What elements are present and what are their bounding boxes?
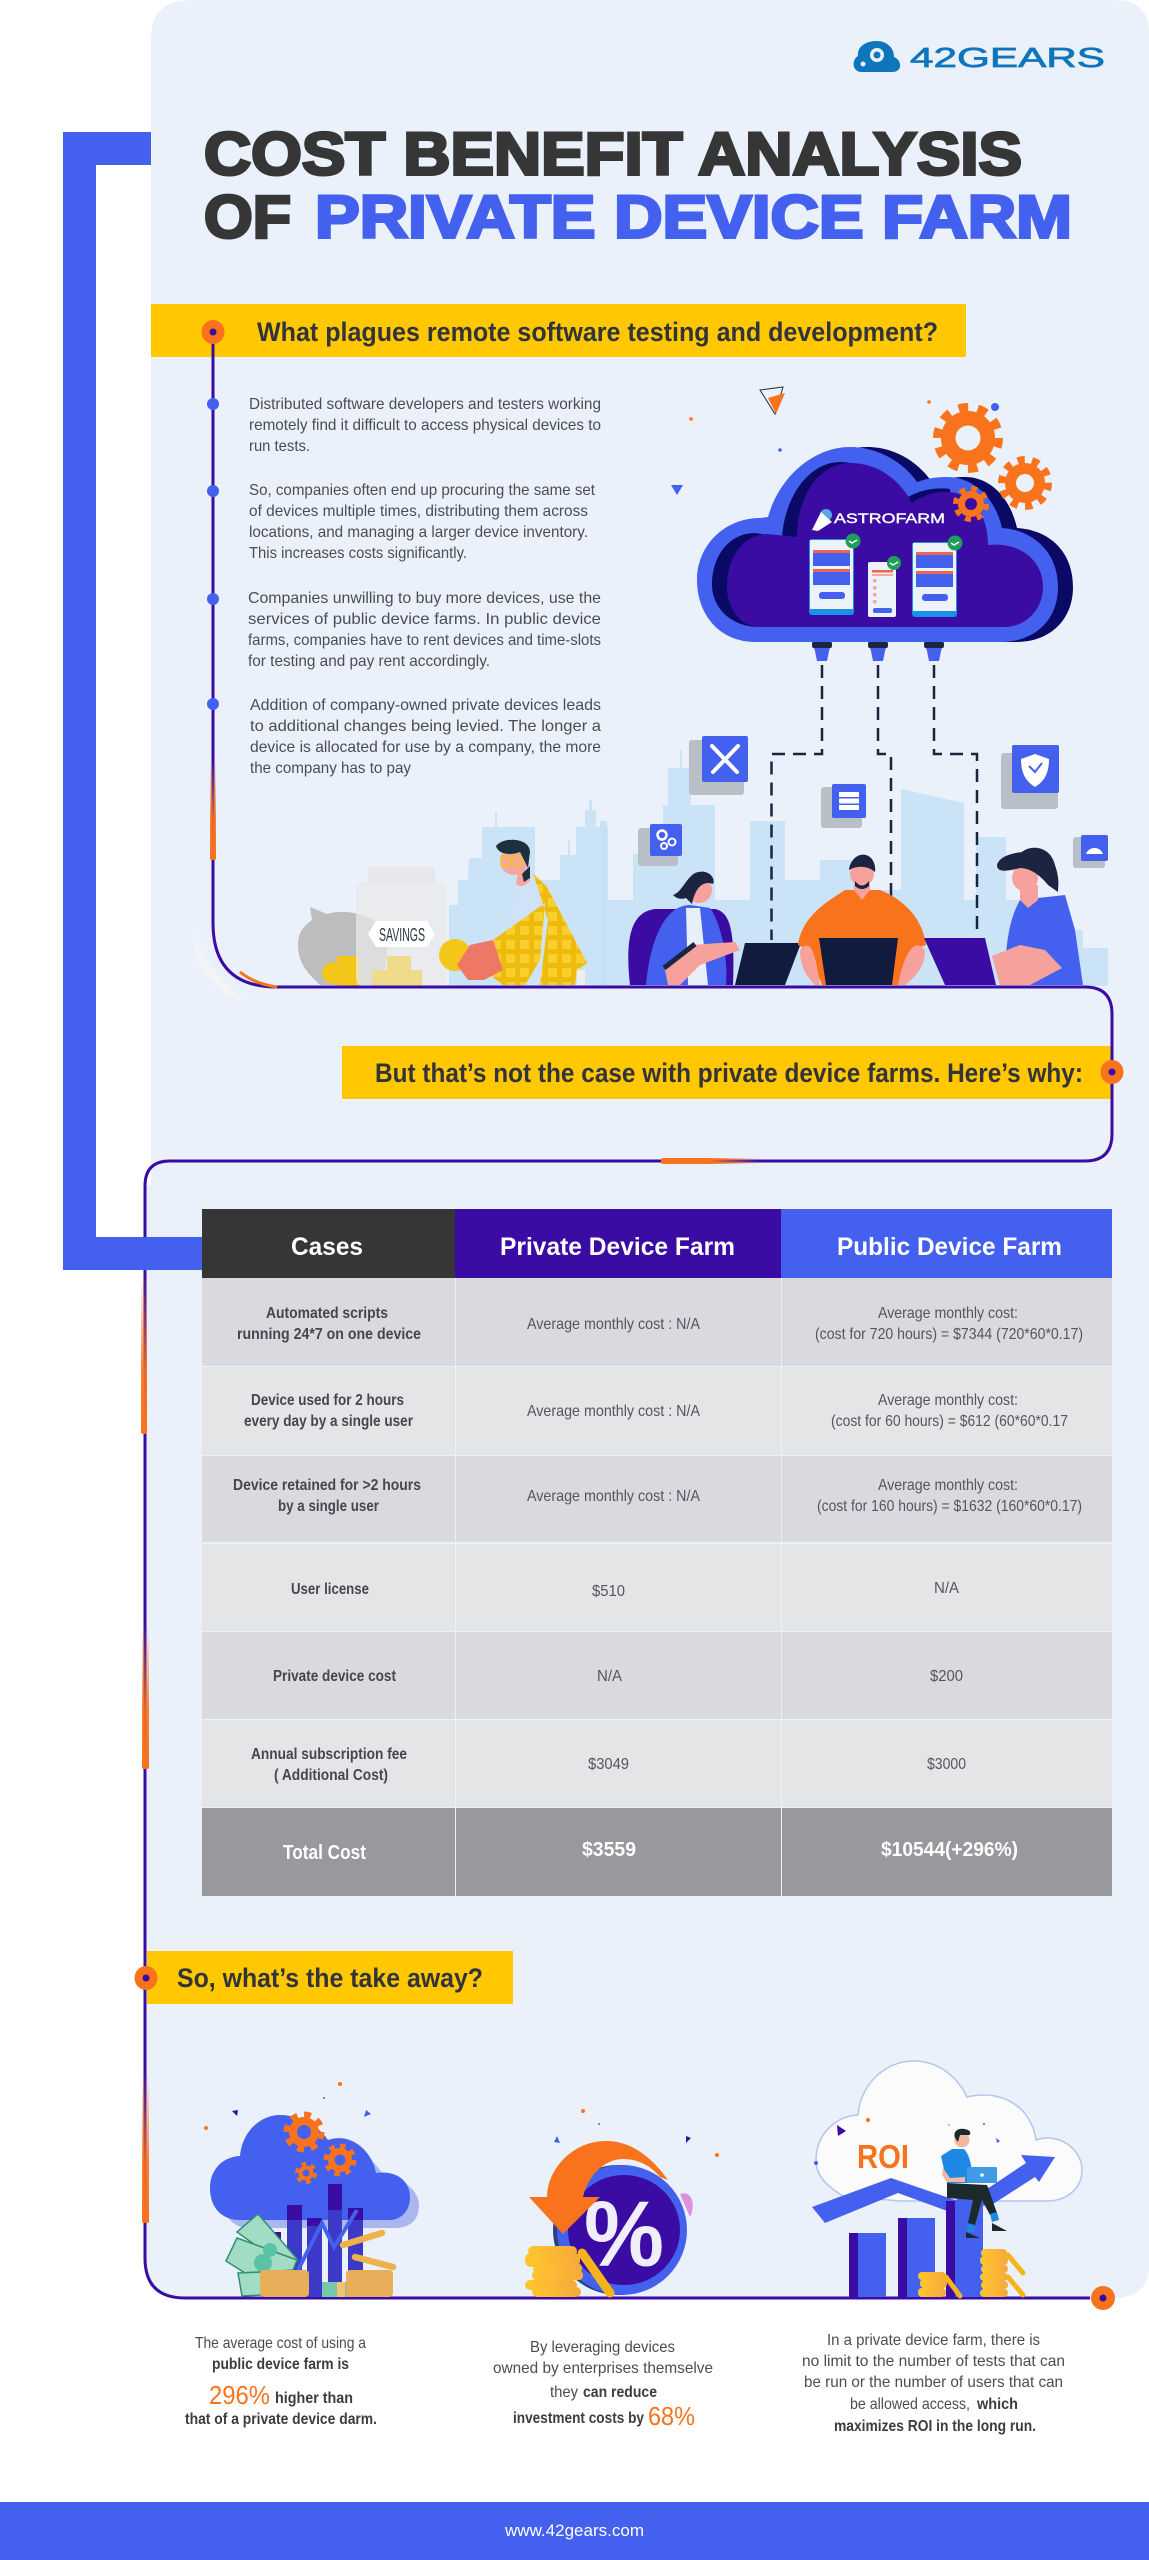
- takeaway text: ROI: In a private device farm, there is: [827, 2332, 1040, 2349]
- timeline dot: section one: [202, 320, 224, 344]
- text block: company-owned devices: [250, 697, 601, 777]
- row: annual subscription: Annual subscription fee: [251, 1746, 407, 1763]
- blue bracket: [63, 132, 202, 1270]
- city skyline: [449, 750, 1108, 986]
- row: 2 hours: Average monthly cost:: [878, 1392, 1018, 1409]
- heading bar: what plagues: [151, 304, 966, 357]
- row: 2 hours: [244, 1392, 1068, 1430]
- jar lid: [368, 867, 435, 882]
- takeaway text: ROI: maximizes ROI in the long run.: [834, 2418, 1036, 2435]
- takeaway text: investment costs: investment costs by: [513, 2410, 644, 2427]
- row: automated scripts: (cost for 720 hours) = $7344 (720*60*0.17): [815, 1326, 1083, 1343]
- icon: server: [821, 784, 866, 828]
- timeline dot: section two: [1100, 1060, 1124, 1084]
- text block: procuring devices: of devices multiple times, distributing them across: [249, 503, 588, 520]
- row: user license: [291, 1580, 959, 1600]
- row backgrounds: [202, 1278, 1112, 1896]
- connectors from cloud: [772, 642, 977, 940]
- background panel: [146, 0, 1149, 2298]
- takeaway text: public farm cost: that of a private device darm.: [185, 2411, 377, 2428]
- takeaway text: ROI: be run or the number of users that can: [804, 2374, 1063, 2391]
- row: user license: N/A: [934, 1580, 959, 1597]
- illustration: cloud with chart and money: [204, 2082, 419, 2297]
- row: 2 hours: (cost for 60 hours) = $612 (60*60*0.17: [831, 1413, 1068, 1430]
- icon: gears box: [638, 824, 682, 866]
- astrofarm brand: ASTROFARM: [834, 510, 945, 526]
- row: user license: $510: [592, 1583, 625, 1600]
- takeaway text: public farm cost: [185, 2335, 377, 2428]
- comparison table: [202, 1209, 1112, 1896]
- row: annual subscription: $3000: [927, 1756, 966, 1773]
- illustration: woman at laptop: [628, 872, 801, 985]
- timeline dot: end: [1091, 2286, 1115, 2310]
- ROI label: ROI: [857, 2138, 909, 2175]
- timeline dot: section three: [134, 1966, 158, 1990]
- floating decorations: [671, 387, 999, 495]
- person on chart: [941, 2129, 1007, 2238]
- astrofarm brand: [812, 509, 945, 531]
- coins: [525, 2246, 583, 2297]
- bullets: [207, 398, 219, 710]
- row: more than 2 hours: by a single user: [278, 1498, 379, 1515]
- takeaway text: public farm cost: The average cost of using a: [195, 2335, 366, 2352]
- text block: procuring devices: So, companies often end up procuring the same set: [249, 482, 596, 499]
- row: more than 2 hours: Average monthly cost : N/A: [527, 1488, 700, 1505]
- row: annual subscription: $3049: [588, 1756, 629, 1773]
- row: annual subscription: ( Additional Cost): [274, 1767, 388, 1784]
- row: more than 2 hours: Average monthly cost:: [878, 1477, 1018, 1494]
- timeline connector: [141, 332, 1112, 2298]
- illustration: savings jar and piggy: [298, 867, 447, 986]
- icon: tools: [689, 736, 748, 795]
- row: 2 hours: Device used for 2 hours: [251, 1392, 404, 1409]
- takeaway text: ROI: no limit to the number of tests that can: [802, 2353, 1065, 2370]
- takeaway text: public farm cost: public device farm is: [212, 2356, 349, 2373]
- row: total cost: Total Cost: [283, 1842, 366, 1864]
- heading bar: private device farms: But that’s not the case with private device farms. Here’s why:: [375, 1058, 1083, 1088]
- title: PRIVATE DEVICE FARM: [315, 184, 1072, 250]
- row: automated scripts: [237, 1305, 1083, 1343]
- table header: Cases: [291, 1233, 363, 1261]
- gear medium: [1002, 460, 1048, 506]
- row: more than 2 hours: (cost for 160 hours) = $1632 (160*60*0.17): [817, 1498, 1082, 1515]
- text block: public device farms: services of public device farms. In public device: [248, 611, 601, 628]
- text block: procuring devices: [249, 482, 596, 562]
- text block: company-owned devices: to additional changes being levied. The longer a: [250, 718, 601, 735]
- bars: [849, 2201, 983, 2297]
- text block: public device farms: Companies unwilling to buy more devices, use the: [248, 590, 601, 607]
- logo: 42Gears: [854, 41, 1105, 73]
- heading bar: takeaway: [147, 1951, 513, 2004]
- illustration: man at laptop: [798, 855, 926, 985]
- row: user license: User license: [291, 1581, 369, 1598]
- text block: procuring devices: locations, and managing a larger device inventory.: [249, 524, 588, 541]
- white cloud: [816, 2061, 1082, 2201]
- heading bar: private device farms: [342, 1046, 1112, 1099]
- row: more than 2 hours: [233, 1477, 1082, 1515]
- title: OF: [204, 184, 291, 250]
- illustration: man with coin: [439, 840, 587, 986]
- savings label: SAVINGS: [379, 925, 425, 945]
- bars: [272, 2184, 363, 2297]
- takeaway text: investment costs: they: [550, 2384, 578, 2401]
- gear small: [956, 488, 986, 520]
- takeaway text: investment costs: 68%: [648, 2401, 695, 2431]
- row: private device cost: [273, 1668, 963, 1685]
- row: automated scripts: Average monthly cost : N/A: [527, 1316, 700, 1333]
- text block: distributed developers: [249, 396, 601, 455]
- row: total cost: $10544(+296%): [881, 1839, 1018, 1861]
- row: total cost: [283, 1839, 1018, 1864]
- row: automated scripts: running 24*7 on one device: [237, 1326, 421, 1343]
- gears: [286, 2114, 354, 2182]
- takeaway text: public farm cost: higher than: [275, 2390, 353, 2407]
- logo: 42Gears: 42GEARS: [910, 42, 1105, 73]
- takeaway text: investment costs: can reduce: [583, 2384, 657, 2401]
- row: private device cost: N/A: [597, 1668, 622, 1685]
- text block: distributed developers: remotely find it difficult to access physical devices to: [249, 417, 601, 434]
- icon: shield: [1001, 745, 1059, 809]
- row: private device cost: Private device cost: [273, 1668, 396, 1685]
- row: total cost: $3559: [582, 1839, 636, 1861]
- illustration: ROI: [812, 2061, 1082, 2297]
- illustration: AstroFarm cloud: [697, 408, 1073, 642]
- gold coins: [322, 956, 360, 986]
- takeaway text: investment costs: owned by enterprises themselve: [493, 2360, 713, 2377]
- table header: Public Device Farm: [837, 1233, 1062, 1261]
- footer: www.42gears.com: [504, 2522, 644, 2540]
- sparks: [204, 2082, 371, 2130]
- row: more than 2 hours: Device retained for >2 hours: [233, 1477, 421, 1494]
- takeaway text: ROI: [802, 2332, 1065, 2435]
- takeaway text: investment costs: [493, 2339, 713, 2431]
- text block: distributed developers: Distributed software developers and testers working: [249, 396, 601, 413]
- text block: company-owned devices: Addition of company-owned private devices leads: [250, 697, 601, 714]
- table header: [202, 1209, 1112, 1278]
- piggy bank: [298, 907, 387, 985]
- gear large: [938, 408, 998, 468]
- text block: public device farms: [248, 590, 601, 670]
- takeaway text: public farm cost: 296%: [209, 2380, 270, 2410]
- takeaway text: ROI: which: [976, 2396, 1018, 2413]
- text block: procuring devices: This increases costs significantly.: [249, 545, 467, 562]
- text block: public device farms: farms, companies have to rent devices and time-slots: [248, 632, 601, 649]
- illustration: percent coin with arrow: %: [584, 2182, 664, 2286]
- text block: distributed developers: run tests.: [249, 438, 310, 455]
- orange arrow: [529, 2141, 668, 2234]
- icon: gauge: [1073, 835, 1108, 868]
- white swoosh: [193, 933, 247, 1000]
- row: 2 hours: every day by a single user: [244, 1413, 413, 1430]
- jar coins: [372, 956, 422, 986]
- row: private device cost: $200: [930, 1668, 963, 1685]
- row: annual subscription: [251, 1746, 966, 1784]
- illustration: woman with purple laptop: [924, 848, 1083, 985]
- jar: [356, 882, 447, 986]
- title: COST BENEFIT ANALYSIS: [204, 120, 1022, 188]
- coins: [260, 2233, 393, 2297]
- text block: company-owned devices: device is allocated for use by a company, the more: [250, 739, 601, 756]
- text block: public device farms: for testing and pay rent accordingly.: [248, 653, 490, 670]
- takeaway text: investment costs: By leveraging devices: [530, 2339, 675, 2356]
- heading bar: takeaway: So, what’s the take away?: [177, 1963, 483, 1993]
- row: 2 hours: Average monthly cost : N/A: [527, 1403, 700, 1420]
- illustration: percent coin with arrow: [525, 2109, 719, 2297]
- row: automated scripts: Automated scripts: [266, 1305, 388, 1322]
- title: [204, 120, 1072, 250]
- takeaway text: ROI: be allowed access,: [850, 2396, 970, 2413]
- money: [226, 2214, 368, 2297]
- savings label: [368, 921, 435, 947]
- text block: company-owned devices: the company has to pay: [250, 760, 411, 777]
- footer: [0, 2502, 1149, 2560]
- table header: Private Device Farm: [500, 1233, 735, 1261]
- blue arrow: [812, 2155, 1055, 2223]
- devices: [809, 534, 962, 617]
- coins: [918, 2249, 1008, 2297]
- heading bar: what plagues: What plagues remote software testing and development?: [257, 317, 938, 347]
- row: automated scripts: Average monthly cost:: [878, 1305, 1018, 1322]
